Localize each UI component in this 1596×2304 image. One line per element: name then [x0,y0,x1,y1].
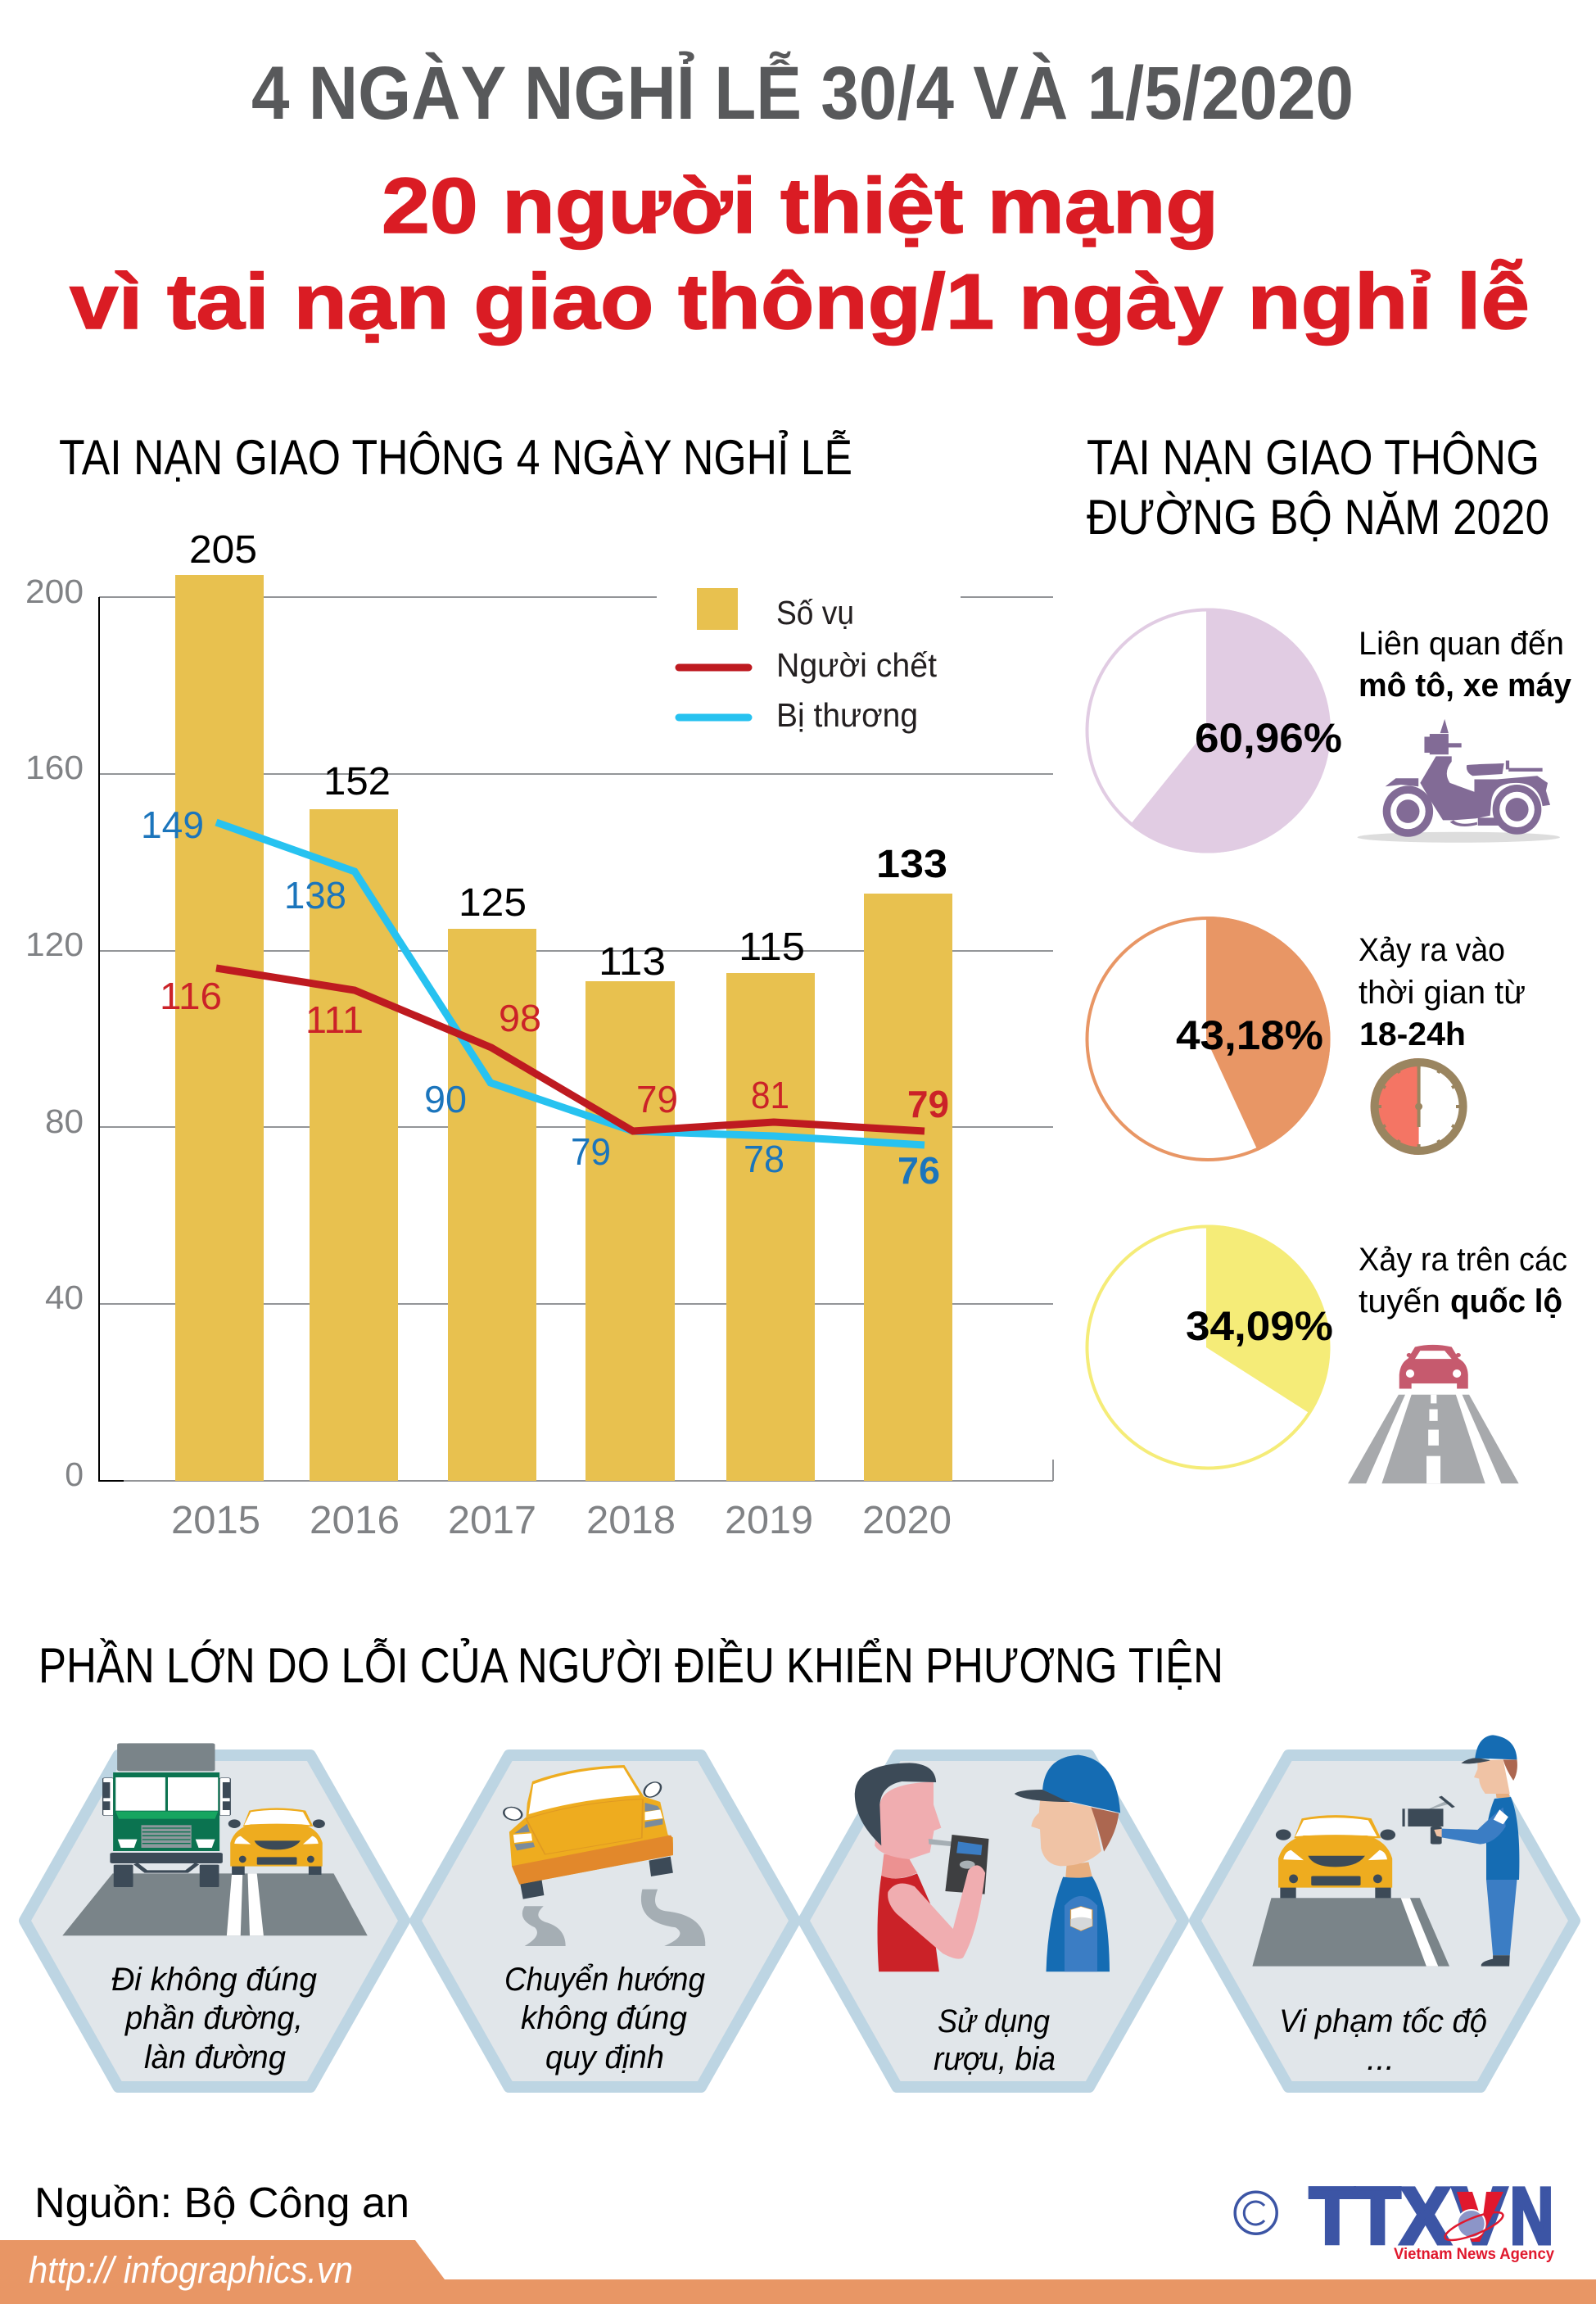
caption: Vi phạm tốc độ [1279,2003,1487,2039]
caption: quy định [545,2039,664,2075]
text: motorcycles: mô tô, xe máy [1359,668,1572,704]
logo: TTXVN: V [1453,2171,1507,2261]
heading: road accidents 2020: ĐƯỜNG BỘ NĂM 2020 [1087,490,1549,545]
pie chart: motorcycles 60,96% [1087,608,1342,853]
logo: TTXVN: Vietnam News Agency [1394,2246,1554,2263]
bar values: 113 [599,940,666,984]
icon: breath test figures [855,1755,1120,1971]
text: national roads: Xảy ra trên các [1359,1242,1567,1278]
death values: 98 [499,997,541,1039]
y axis labels: 40 [45,1279,84,1316]
pie chart: national roads 34,09%: 34,09% [1186,1303,1333,1349]
title: main heading: 4 NGÀY NGHỈ LỄ 30/4 VÀ 1/5/2020 [251,50,1354,135]
title: main heading [70,50,1530,346]
panel: combo chart of accidents, deaths and injuries [25,528,1053,1542]
website url: http:// infographics.vn [29,2249,353,2291]
panel: hexagon alcohol [803,1755,1183,2087]
injured values: 79 [571,1130,611,1173]
pie chart: 18-24h 43,18% [1087,917,1331,1160]
legend: Người chết [776,646,938,684]
injured values: 149 [141,803,204,846]
death values: 79 [636,1078,678,1120]
bar values: 152 [323,760,391,803]
icon: road, car and officer with speed gun [1252,1735,1519,1967]
x axis years: 2018 [586,1499,676,1542]
bar values [189,528,947,984]
icon: car on road [1348,1345,1519,1483]
icon: truck and car on road [62,1743,368,1935]
caption: Đi không đúng [111,1962,317,1998]
injured values: 90 [424,1078,467,1120]
y axis labels: 0 [65,1455,84,1493]
text: time of day [1359,932,1526,1052]
y axis labels: 160 [25,749,84,786]
logo: TTXVN [1235,2171,1554,2263]
panel: hexagon speeding [1195,1735,1575,2087]
x axis years: 2020 [862,1499,952,1542]
death values: 81 [751,1074,789,1116]
icon: motorbike [1358,719,1560,843]
heading: driver errors: PHẦN LỚN DO LỖI CỦA NGƯỜI ĐIỀU KHIỂN PHƯƠNG TIỆN [38,1638,1223,1693]
y axis labels [25,573,84,1493]
death values: 116 [160,975,222,1017]
text: national roads [1359,1242,1567,1319]
pie chart: motorcycles 60,96%: 60,96% [1195,715,1342,761]
pie chart: 18-24h 43,18%: 43,18% [1176,1012,1323,1058]
text: motorcycles [1359,626,1572,704]
y axis labels: 80 [45,1102,84,1140]
pie chart: national roads 34,09% [1087,1224,1333,1468]
injured values: 78 [744,1138,784,1180]
legend [657,586,961,741]
death values [160,975,949,1125]
caption: Sử dụng [938,2003,1050,2039]
injured values [141,803,940,1192]
heading: chart section: TAI NẠN GIAO THÔNG 4 NGÀY NGHỈ LỄ [59,430,852,485]
death values: 79 [907,1083,949,1125]
caption [504,1962,705,2075]
source: Nguồn: Bộ Công an [34,2180,409,2227]
caption: Chuyển hướng [504,1962,705,1998]
bars: số vụ [175,575,952,1481]
caption: rượu, bia [934,2041,1056,2077]
title: main heading: vì tai nạn giao thông/1 ngày nghỉ lễ [70,258,1530,346]
caption: ... [1367,2041,1395,2077]
text: motorcycles: Liên quan đến [1359,626,1564,662]
legend: Bị thương [776,696,918,734]
text: time of day: thời gian từ [1359,975,1526,1011]
caption [111,1962,317,2075]
title: main heading: 20 người thiệt mạng [382,162,1218,250]
caption: phần đường, [124,2000,303,2036]
icon: skidding car [501,1765,705,1946]
x axis years: 2017 [448,1499,536,1542]
text: national roads: quốc lộ [1450,1283,1562,1319]
injured values: 76 [897,1149,940,1192]
y axis labels: 200 [25,573,84,610]
legend: Số vụ [776,594,854,631]
heading: road accidents 2020: TAI NẠN GIAO THÔNG [1087,430,1539,485]
panel: hexagon wrong lane [25,1743,405,2087]
text: national roads: tuyến [1359,1283,1440,1319]
bar values: 133 [876,843,947,886]
x axis years [171,1499,952,1542]
logo: TTXVN: TTX [1309,2171,1450,2261]
bar values: 125 [459,881,527,925]
line: bị thương [216,822,925,1145]
text: time of day: 18-24h [1359,1016,1466,1052]
bar values: 205 [189,528,257,572]
caption: không đúng [521,2000,687,2036]
logo: TTXVN: N [1510,2171,1553,2261]
caption [934,2003,1056,2077]
heading: road accidents 2020 [1087,430,1549,545]
caption: làn đường [144,2039,286,2075]
panel: hexagon illegal turn [415,1755,795,2087]
line: người chết [216,968,925,1131]
footer band [0,2240,1596,2304]
y axis labels: 120 [25,926,84,963]
text: time of day: Xảy ra vào [1359,932,1505,968]
x axis years: 2019 [725,1499,813,1542]
death values: 111 [305,998,364,1041]
icon: clock [1371,1058,1463,1155]
bar values: 115 [739,926,805,969]
x axis years: 2016 [310,1499,400,1542]
caption [1279,2003,1487,2077]
injured values: 138 [284,874,346,917]
x axis years: 2015 [171,1499,260,1542]
